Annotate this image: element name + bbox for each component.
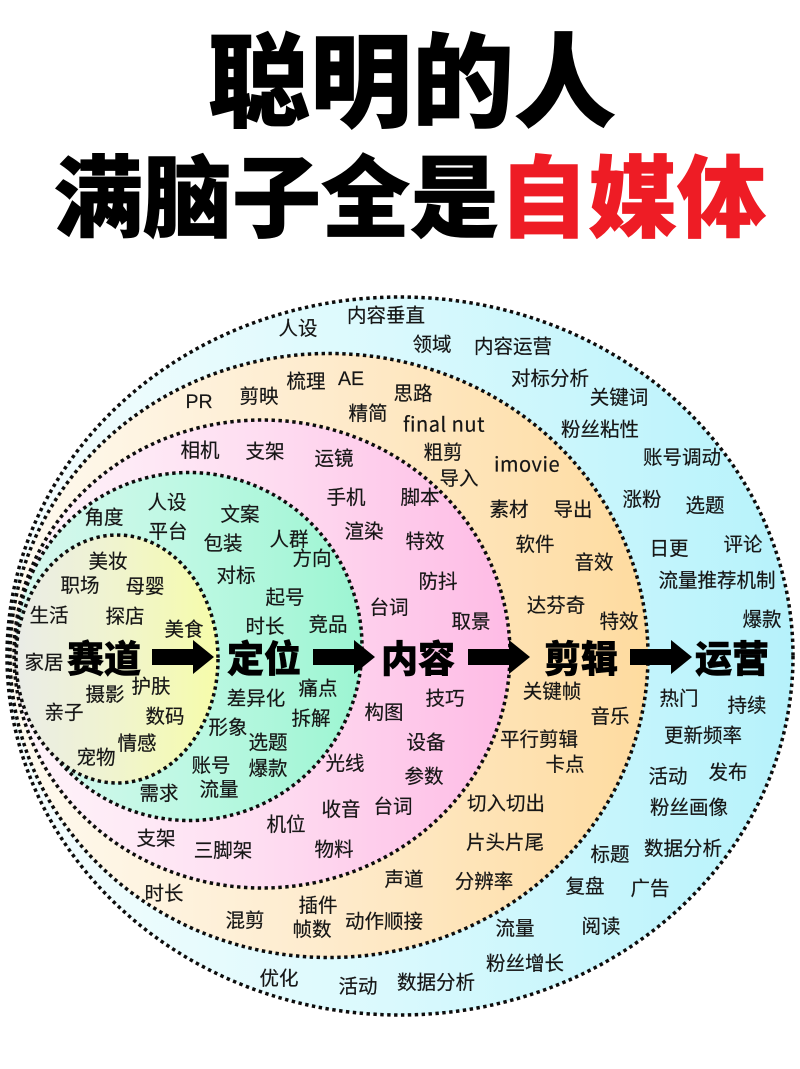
title line 2 with red highlight: 满脑子全是自媒体 bbox=[54, 127, 766, 256]
keywords: 赛道: 宠物 bbox=[76, 747, 116, 769]
keywords: 内容: 脚本 bbox=[400, 487, 440, 509]
keywords: 运营: 粉丝粘性 bbox=[561, 419, 639, 441]
keywords: 运营: 粉丝画像 bbox=[650, 797, 728, 819]
keywords: 剪辑: 音效 bbox=[574, 552, 614, 574]
keywords: 运营: 数据分析 bbox=[644, 838, 722, 860]
keywords: 剪辑: 片头片尾 bbox=[466, 832, 544, 854]
keywords: 内容: 机位 bbox=[266, 814, 306, 836]
keywords: 赛道: 母婴 bbox=[125, 576, 165, 598]
keywords: 赛道: 情感 bbox=[117, 733, 157, 755]
keywords: 赛道: 家居 bbox=[24, 652, 64, 674]
keywords: 剪辑: 剪映 bbox=[239, 386, 279, 408]
stage labels bbox=[67, 629, 769, 683]
keywords: 赛道: 美食 bbox=[164, 619, 204, 641]
concentric circle diagram bbox=[7, 297, 793, 1015]
keywords: 运营: 流量 bbox=[495, 918, 535, 940]
keywords: 赛道: 摄影 bbox=[85, 684, 125, 706]
keywords: 内容: 运镜 bbox=[314, 448, 354, 470]
keywords: 赛道: 亲子 bbox=[44, 702, 84, 724]
keywords: 内容: 支架 bbox=[136, 828, 176, 850]
keywords: 剪辑: 精简 bbox=[348, 403, 388, 425]
keywords: 剪辑: 素材 bbox=[489, 499, 529, 521]
keywords: 剪辑: 软件 bbox=[515, 534, 555, 556]
keywords: 运营: 人设 bbox=[278, 318, 318, 340]
keywords: 运营: 发布 bbox=[708, 762, 748, 784]
keywords: 运营: 标题 bbox=[590, 844, 630, 866]
arrow: 内容 to 剪辑 bbox=[468, 640, 530, 674]
title line 1: 聪明的人 bbox=[208, 2, 616, 149]
keywords: 运营: 阅读 bbox=[581, 916, 621, 938]
keywords: 剪辑: 导出 bbox=[553, 499, 593, 521]
keywords: 内容: 台词 bbox=[369, 597, 409, 619]
keywords: 剪辑: 达芬奇 bbox=[527, 595, 585, 617]
keywords: 内容: 渲染 bbox=[344, 521, 384, 543]
keywords: 内容: 特效 bbox=[405, 531, 445, 553]
keywords: 定位: 对标 bbox=[216, 565, 256, 587]
keywords: 运营: 更新频率 bbox=[664, 725, 742, 747]
keywords: 内容: 台词 bbox=[373, 796, 413, 818]
keywords: 赛道: 护肤 bbox=[131, 676, 171, 698]
keywords: 剪辑: 特效 bbox=[599, 611, 639, 633]
keywords: 运营: 复盘 bbox=[565, 876, 605, 898]
keywords: 剪辑: 切入切出 bbox=[467, 793, 545, 815]
keywords: 剪辑: 梳理 bbox=[286, 371, 326, 393]
keywords: 定位: 人设 bbox=[147, 492, 187, 514]
keywords: 运营: 内容运营 bbox=[474, 336, 552, 358]
keywords: 运营: 爆款 bbox=[742, 609, 782, 631]
keywords: 运营: 内容垂直 bbox=[347, 305, 425, 327]
keywords: 运营: 对标分析 bbox=[511, 368, 589, 390]
ring: 剪辑 circle bbox=[10, 354, 648, 958]
keywords: 定位: 拆解 bbox=[291, 708, 331, 730]
keywords: 定位: 人群 bbox=[269, 529, 309, 551]
arrow: 定位 to 内容 bbox=[313, 640, 375, 674]
keywords: 剪辑: 时长 bbox=[144, 883, 184, 905]
keywords: 运营: 涨粉 bbox=[622, 489, 662, 511]
keywords: 运营: 领域 bbox=[412, 334, 452, 356]
keywords: 定位: 方向 bbox=[292, 548, 332, 570]
keywords: 剪辑: 导入 bbox=[439, 468, 479, 490]
keywords: 赛道: 美妆 bbox=[88, 551, 128, 573]
keywords: 运营: 活动 bbox=[338, 976, 378, 998]
keywords: 运营: 活动 bbox=[648, 766, 688, 788]
keywords: 剪辑 bbox=[144, 368, 639, 941]
keywords: 内容: 相机 bbox=[180, 440, 220, 462]
keywords: 剪辑: PR bbox=[185, 391, 213, 413]
keywords: 定位: 包装 bbox=[203, 533, 243, 555]
label: 剪辑: 剪辑 bbox=[544, 629, 618, 683]
keywords: 运营: 账号调动 bbox=[643, 447, 721, 469]
keywords: 剪辑: 思路 bbox=[393, 383, 433, 405]
keywords: 剪辑: 帧数 bbox=[292, 919, 332, 941]
keywords: 剪辑: 关键帧 bbox=[523, 681, 581, 703]
keywords: 剪辑: 卡点 bbox=[545, 754, 585, 776]
ring: 运营 circle bbox=[7, 297, 793, 1015]
keywords: 定位: 爆款 bbox=[248, 758, 288, 780]
keywords: 内容: 手机 bbox=[326, 487, 366, 509]
keywords: 定位: 平台 bbox=[148, 521, 188, 543]
keywords: 剪辑: 粗剪 bbox=[423, 442, 463, 464]
keywords: 定位: 痛点 bbox=[298, 678, 338, 700]
keywords: 剪辑: imovie bbox=[494, 448, 560, 478]
keywords: 内容: 光线 bbox=[325, 753, 365, 775]
keywords: 剪辑: 插件 bbox=[298, 895, 338, 917]
keywords: 赛道: 探店 bbox=[105, 606, 145, 628]
keywords: 内容: 设备 bbox=[406, 732, 446, 754]
keywords: 定位: 需求 bbox=[139, 783, 179, 805]
keywords: 剪辑: 声道 bbox=[384, 869, 424, 891]
keywords: 定位: 差异化 bbox=[227, 688, 285, 710]
keywords: 赛道: 生活 bbox=[29, 605, 69, 627]
ring: 赛道 circle bbox=[16, 535, 218, 783]
keywords: 赛道: 职场 bbox=[60, 575, 100, 597]
keywords: 剪辑: 分辨率 bbox=[455, 871, 513, 893]
keywords: 运营: 优化 bbox=[259, 968, 299, 990]
keywords: 剪辑: AE bbox=[338, 368, 364, 390]
arrow: 剪辑 to 运营 bbox=[630, 640, 692, 674]
label: 运营: 运营 bbox=[695, 629, 769, 683]
keywords: 运营: 广告 bbox=[630, 878, 670, 900]
keywords: 运营: 热门 bbox=[659, 688, 699, 710]
keywords: 内容: 三脚架 bbox=[194, 840, 252, 862]
keywords: 内容: 收音 bbox=[321, 799, 361, 821]
keywords: 内容: 防抖 bbox=[418, 571, 458, 593]
ring: 定位 circle bbox=[16, 472, 362, 820]
keywords: 剪辑: 动作顺接 bbox=[345, 911, 423, 933]
keywords: 内容: 构图 bbox=[364, 702, 404, 724]
keywords: 剪辑: 音乐 bbox=[590, 706, 630, 728]
keywords: 定位: 文案 bbox=[220, 504, 260, 526]
title bbox=[54, 2, 766, 256]
keywords: 剪辑: 平行剪辑 bbox=[500, 729, 578, 751]
keywords: 内容: 物料 bbox=[314, 839, 354, 861]
keywords: 内容: 参数 bbox=[404, 766, 444, 788]
keywords: 定位: 竞品 bbox=[308, 614, 348, 636]
keywords: 运营: 关键词 bbox=[590, 387, 648, 409]
keywords: 剪辑: final nut bbox=[403, 408, 485, 438]
keywords: 运营: 流量推荐机制 bbox=[658, 570, 776, 592]
ring: 内容 circle bbox=[14, 420, 510, 888]
arrow: 赛道 to 定位 bbox=[152, 640, 214, 674]
label: 赛道: 赛道 bbox=[67, 629, 141, 683]
keywords: 定位: 形象 bbox=[208, 717, 248, 739]
keywords: 运营: 数据分析 bbox=[397, 972, 475, 994]
label: 定位: 定位 bbox=[227, 629, 301, 683]
keywords: 定位: 流量 bbox=[199, 779, 239, 801]
keywords: 定位: 选题 bbox=[248, 732, 288, 754]
keywords: 定位 bbox=[84, 492, 348, 805]
keywords: 运营: 评论 bbox=[723, 534, 763, 556]
keywords: 定位: 时长 bbox=[245, 616, 285, 638]
keywords: 剪辑: 混剪 bbox=[225, 910, 265, 932]
keywords: 赛道: 数码 bbox=[145, 706, 185, 728]
keywords: 运营: 选题 bbox=[685, 495, 725, 517]
keywords: 定位: 账号 bbox=[191, 755, 231, 777]
keywords: 赛道 bbox=[24, 551, 204, 769]
keywords: 运营 bbox=[259, 305, 782, 998]
label: 内容: 内容 bbox=[381, 629, 455, 683]
keywords: 内容: 技巧 bbox=[425, 688, 465, 710]
keywords: 运营: 粉丝增长 bbox=[486, 953, 564, 975]
keywords: 运营: 持续 bbox=[727, 695, 767, 717]
keywords: 定位: 起号 bbox=[265, 587, 305, 609]
keywords: 定位: 角度 bbox=[84, 507, 124, 529]
keywords: 内容: 取景 bbox=[451, 611, 491, 633]
keywords: 运营: 日更 bbox=[649, 538, 689, 560]
keywords: 内容: 支架 bbox=[245, 441, 285, 463]
keywords: 内容 bbox=[136, 440, 491, 862]
